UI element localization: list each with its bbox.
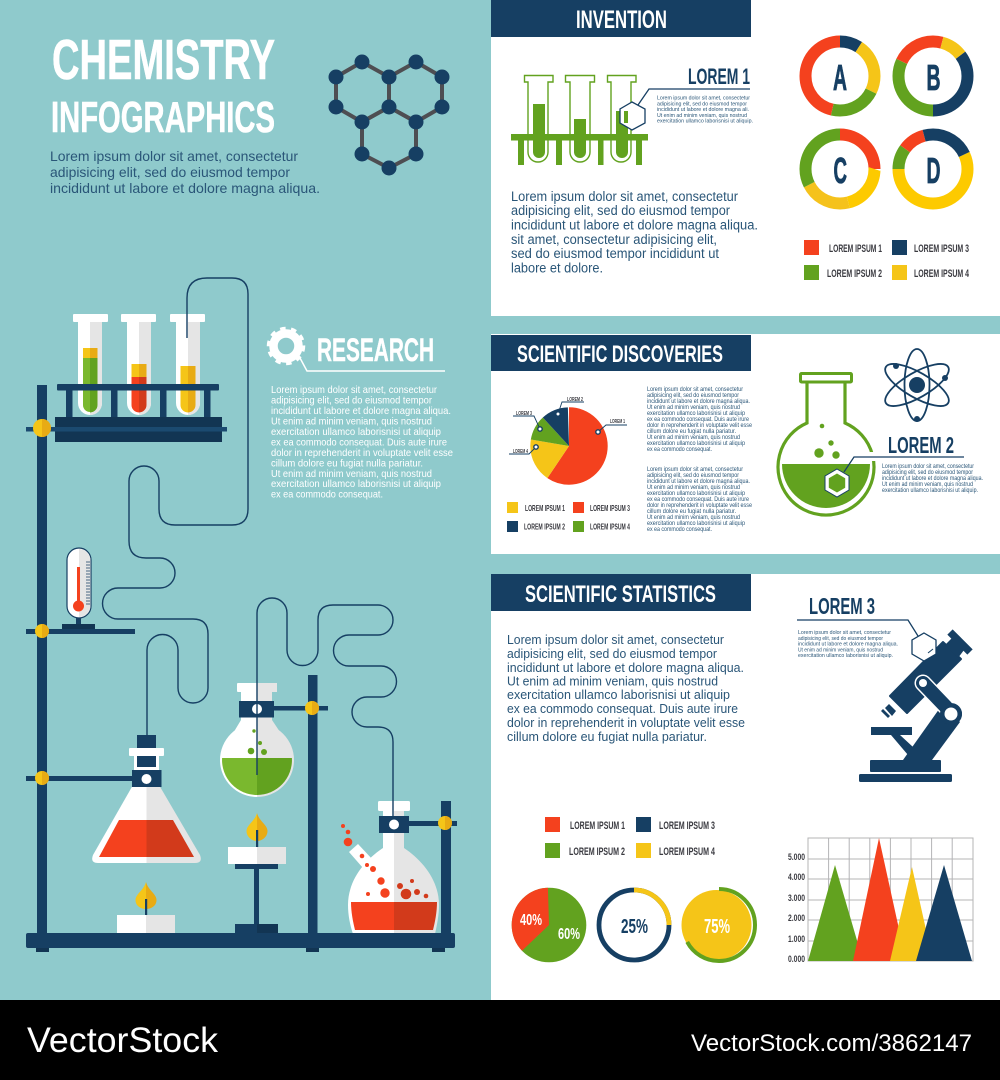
heading bar: scientific discoveries [491, 335, 751, 371]
small text: lorem 3: exercitation ullamco laborisnisi ut aliquip. [798, 653, 893, 659]
band: teal divider two [491, 554, 1000, 574]
text block: invention: sit amet, consectetur adipisicing elit, [511, 232, 717, 247]
small text: discoveries block one: Lorem ipsum dolor sit amet, consectetur [647, 387, 743, 393]
small text: lorem 1: incididunt ut labore et dolore magna ali. [657, 107, 749, 113]
round flask: green [220, 683, 328, 797]
title [51, 28, 275, 142]
heading bar: invention [491, 0, 751, 37]
small text: discoveries block one: incididunt ut labore et dolore magna aliqua. [647, 399, 750, 405]
test tube rack [26, 384, 227, 442]
text block: research: Ut enim ad minim veniam, quis nostrud [271, 468, 432, 480]
icon: green flask [778, 374, 964, 515]
icon: molecule [328, 54, 450, 176]
stand: base [26, 933, 455, 952]
text block: statistics: ex ea commodo consequat. Duis aute irure [507, 701, 738, 716]
small text: lorem 1 [657, 96, 753, 125]
heading: lorem 2: LOREM 2 [888, 432, 954, 458]
small text: discoveries block two: dolor in reprehenderit in voluptate velit esse [647, 503, 753, 509]
legend: invention: LOREM IPSUM 2 [827, 268, 882, 280]
ring chart: 25 percent [599, 890, 669, 960]
small text: discoveries block one: ex ea commodo consequat. Duis aute irure [647, 417, 750, 423]
text block: research: ex ea commodo consequat. [271, 489, 383, 501]
small text: discoveries block two: ex ea commodo consequat. Duis aute irure [647, 497, 750, 503]
text block: research: adipisicing elit, sed do eiusmod tempor [271, 394, 432, 406]
small text: discoveries block one: ex ea commodo consequat. [647, 447, 712, 453]
text block: statistics [507, 632, 745, 744]
burner flame: left [117, 882, 175, 933]
small text: discoveries block two: Ut enim ad minim veniam, quis nostrud [647, 485, 740, 491]
icon: atom [880, 349, 954, 422]
intro text [50, 148, 320, 196]
donut chart: D: D [926, 150, 941, 191]
panel: left teal column [0, 0, 491, 1000]
small text: discoveries block one: exercitation ullamco laborisnisi ut aliquip [647, 441, 746, 447]
stand: small pole [441, 801, 451, 935]
small text: lorem 2: Ut enim ad minim veniam, quis nostrud [882, 482, 973, 488]
ring chart: 75 percent [682, 889, 755, 961]
small text: lorem 3: adipisicing elit, sed do eiusmod tempor [798, 636, 883, 642]
pie chart: 40 and 60 percent: 60% [558, 926, 580, 943]
small text: discoveries block two: Ut enim ad minim veniam, quis nostrud [647, 515, 740, 521]
stand: right pole [308, 675, 318, 935]
small text: discoveries block one: Ut enim ad minim veniam, quis nostrud [647, 405, 740, 411]
small text: lorem 1: adipisicing elit, sed do eiusmod tempor [657, 101, 747, 107]
small text: discoveries block one: adipisicing elit, sed do eiusmod tempor [647, 393, 739, 399]
round flask: red [341, 801, 457, 934]
legend: statistics: LOREM IPSUM 2 [569, 846, 625, 858]
heading bar: scientific statistics: SCIENTIFIC STATISTICS [525, 581, 716, 608]
pie chart: discoveries: LOREM 3 [516, 411, 532, 417]
text block: research: incididunt ut labore et dolore magna aliqua. [271, 405, 451, 417]
callout: lorem 3 hexagon [797, 620, 936, 661]
text block: research [271, 384, 453, 501]
heading bar: invention: INVENTION [576, 6, 667, 34]
lab illustration [26, 278, 457, 952]
text block: invention [511, 189, 758, 276]
band: teal divider one [491, 316, 1000, 334]
small text: lorem 3: Lorem ipsum dolor sit amet, consectetur [798, 630, 891, 636]
legend: statistics [545, 817, 716, 858]
text block: invention: incididunt ut labore et dolore magna aliqua. [511, 218, 758, 232]
heading bar: scientific statistics [491, 574, 751, 611]
heading: lorem 3: LOREM 3 [809, 593, 875, 619]
pie chart: discoveries [509, 397, 627, 465]
small text: discoveries block two: cillum dolore eu fugiat nulla pariatur. [647, 509, 736, 515]
burner flame: centre [228, 813, 286, 934]
small text: lorem 2: adipisicing elit, sed do eiusmod tempor [882, 470, 973, 476]
clamp knobs [33, 419, 452, 830]
small text: discoveries block one [647, 387, 753, 453]
pie chart: discoveries: LOREM 2 [567, 397, 583, 403]
icon: research gear [269, 329, 445, 371]
heading: research: RESEARCH [317, 332, 434, 368]
small text: lorem 1: Lorem ipsum dolor sit amet, consectetur [657, 96, 750, 102]
legend: statistics: LOREM IPSUM 4 [659, 846, 716, 858]
legend: discoveries: LOREM IPSUM 4 [590, 522, 630, 532]
heading: lorem 1: LOREM 1 [688, 64, 750, 89]
pie chart: 40 and 60 percent [512, 888, 586, 962]
text block: statistics: cillum dolore eu fugiat nulla pariatur. [507, 729, 707, 744]
stand: left pole [37, 385, 47, 935]
pie chart: discoveries: LOREM 1 [610, 419, 625, 425]
text block: invention: adipisicing elit, sed do eiusmod tempor [511, 203, 730, 218]
text block: statistics: Lorem ipsum dolor sit amet, consectetur [507, 632, 725, 647]
donut chart: A: A [833, 57, 847, 98]
pie chart: 40 and 60 percent: 40% [520, 912, 542, 929]
legend: discoveries: LOREM IPSUM 1 [525, 503, 565, 513]
text block: research: Ut enim ad minim veniam, quis nostrud [271, 415, 432, 427]
legend: invention: LOREM IPSUM 4 [914, 268, 970, 280]
text block: research: cillum dolore eu fugiat nulla pariatur. [271, 457, 423, 469]
heading bar: scientific discoveries: SCIENTIFIC DISCOVERIES [517, 341, 723, 368]
tube: lower coil [257, 598, 396, 817]
legend: discoveries: LOREM IPSUM 2 [524, 522, 565, 532]
pie chart: discoveries: LOREM 4 [513, 449, 529, 455]
test tube: red [121, 314, 156, 415]
small text: discoveries block one: Ut enim ad minim veniam, quis nostrud [647, 435, 740, 441]
chart: triangle statistics: 4.000 [788, 872, 805, 882]
small text: discoveries block two: ex ea commodo consequat. [647, 527, 712, 533]
small text: lorem 1: Ut enim ad minim veniam, quis nostrud [657, 113, 747, 119]
text block: statistics: incididunt ut labore et dolore magna aliqua. [507, 660, 744, 675]
text block: statistics: dolor in reprehenderit in voluptate velit esse [507, 715, 745, 730]
text block: research: ex ea commodo consequat. Duis aute irure [271, 436, 447, 448]
small text: lorem 2 [882, 464, 983, 494]
text block: research: exercitation ullamco laborisnisi ut aliquip [271, 478, 441, 490]
small text: discoveries block two: incididunt ut labore et dolore magna aliqua. [647, 479, 750, 485]
text block: invention: Lorem ipsum dolor sit amet, consectetur [511, 189, 738, 204]
tube: top coil [102, 278, 248, 737]
chart: triangle statistics [788, 838, 973, 964]
small text: discoveries block one: cillum dolore eu fugiat nulla pariatur. [647, 429, 736, 435]
legend: discoveries: LOREM IPSUM 3 [590, 503, 630, 513]
ring chart: 25 percent: 25% [621, 916, 648, 938]
donut chart: A [806, 42, 874, 110]
icon: green test tube rack [511, 76, 750, 165]
chart: triangle statistics: 0.000 [788, 954, 805, 964]
legend: statistics: LOREM IPSUM 3 [659, 820, 715, 832]
text block: research: exercitation ullamco laborisnisi ut aliquip [271, 426, 441, 438]
erlenmeyer flask [26, 735, 201, 863]
intro text: incididunt ut labore et dolore magna aliqua. [50, 180, 320, 196]
small text: discoveries block two [647, 467, 753, 533]
donut chart: B [898, 42, 968, 110]
chart: triangle statistics: 3.000 [788, 893, 805, 903]
title: INFOGRAPHICS [51, 93, 275, 142]
footer: watermark bar [0, 1000, 1000, 1080]
small text: discoveries block two: exercitation ullamco laborisnisi ut aliquip [647, 521, 746, 527]
legend: invention: LOREM IPSUM 3 [914, 243, 969, 255]
legend: statistics: LOREM IPSUM 1 [570, 820, 625, 832]
intro text: Lorem ipsum dolor sit amet, consectetur [50, 148, 298, 164]
test tube: green [73, 314, 108, 415]
icon: microscope [859, 632, 970, 782]
text block: invention: labore et dolore. [511, 260, 603, 276]
donut chart: B: B [926, 57, 941, 98]
text block: statistics: exercitation ullamco laborisnisi ut aliquip [507, 687, 730, 702]
thermometer [26, 548, 135, 634]
small text: discoveries block two: adipisicing elit, sed do eiusmod tempor [647, 473, 739, 479]
intro text: adipisicing elit, sed do eiusmod tempor [50, 164, 290, 180]
small text: discoveries block two: exercitation ullamco laborisnisi ut aliquip [647, 491, 746, 497]
chart: triangle statistics: 2.000 [788, 913, 805, 923]
small text: discoveries block one: exercitation ullamco laborisnisi ut aliquip [647, 411, 746, 417]
small text: lorem 2: exercitation ullamco laborisnisi ut aliquip. [882, 488, 978, 494]
legend: invention [804, 240, 970, 280]
text block: research: dolor in reprehenderit in voluptate velit esse [271, 447, 453, 459]
legend: invention: LOREM IPSUM 1 [829, 243, 882, 255]
small text: discoveries block one: dolor in reprehenderit in voluptate velit esse [647, 423, 753, 429]
footer: watermark bar: VectorStock.com/3862147 [691, 1030, 972, 1057]
donut chart: D [898, 134, 968, 204]
donut chart: C: C [834, 150, 847, 191]
text block: statistics: adipisicing elit, sed do eiusmod tempor [507, 646, 718, 661]
small text: discoveries block two: Lorem ipsum dolor sit amet, consectetur [647, 467, 743, 473]
donut chart: C [806, 134, 874, 204]
text block: invention: sed do eiusmod tempor incididunt ut [511, 246, 719, 261]
legend: discoveries [507, 502, 630, 532]
small text: lorem 1: exercitation ullamco laborisnisi ut aliquip. [657, 119, 753, 125]
small text: lorem 2: Lorem ipsum dolor sit amet, consectetur [882, 464, 974, 470]
ring chart: 75 percent: 75% [704, 916, 730, 938]
footer: watermark bar: VectorStock [27, 1021, 219, 1060]
title: CHEMISTRY [52, 28, 275, 92]
chart: triangle statistics: 1.000 [788, 934, 805, 944]
small text: lorem 2: incididunt ut labore et dolore magna aliqua. [882, 476, 983, 482]
small text: lorem 3 [798, 630, 898, 659]
small text: lorem 3: incididunt ut labore et dolore magna aliqua. [798, 642, 898, 648]
small text: lorem 3: Ut enim ad minim veniam, quis nostrud [798, 647, 883, 653]
test tube: yellow [170, 314, 205, 415]
text block: statistics: Ut enim ad minim veniam, quis nostrud [507, 674, 718, 688]
chart: triangle statistics: 5.000 [788, 852, 805, 862]
text block: research: Lorem ipsum dolor sit amet, consectetur [271, 384, 437, 396]
